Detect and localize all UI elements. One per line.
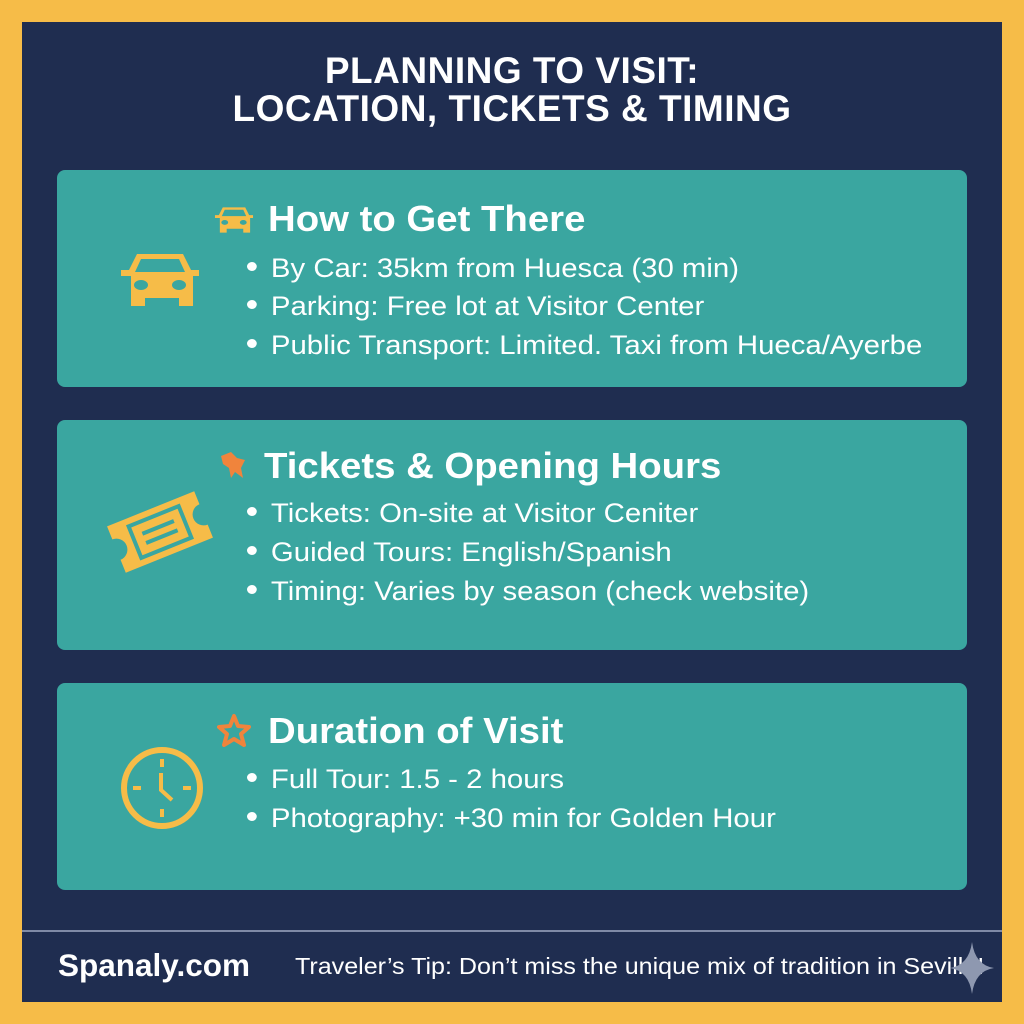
icon: small orange — [221, 452, 245, 478]
title: LOCATION, TICKETS & TIMING — [232, 88, 792, 129]
heading: Duration of Visit — [268, 710, 563, 751]
bullets: Photography: +30 min for Golden Hour — [271, 803, 776, 833]
title: PLANNING TO VISIT: — [325, 50, 699, 91]
footer brand: Spanaly.com — [58, 947, 250, 983]
panel: duration — [57, 683, 967, 890]
icon: sparkle — [950, 942, 994, 994]
heading: Tickets & Opening Hours — [264, 445, 721, 486]
bullets: Full Tour: 1.5 - 2 hours — [271, 764, 564, 794]
bullets: Parking: Free lot at Visitor Center — [271, 291, 704, 321]
icon: clock — [121, 747, 203, 829]
panel: tickets — [57, 420, 967, 650]
bullets: Timing: Varies by season (check website) — [271, 576, 809, 606]
heading: How to Get There — [268, 198, 585, 239]
bullets: By Car: 35km from Huesca (30 min) — [271, 253, 739, 283]
panel: how to get there — [57, 170, 967, 387]
footer tip: Traveler’s Tip: Don’t miss the unique mix of tradition in Seville! — [295, 953, 984, 979]
icon: star — [217, 714, 251, 747]
bullets: Public Transport: Limited. Taxi from Hueca/Ayerbe — [271, 330, 922, 360]
bullets — [247, 498, 809, 606]
icon: small car — [214, 207, 254, 233]
icon: large car — [121, 254, 199, 306]
bullets: Guided Tours: English/Spanish — [271, 537, 672, 567]
bullets — [247, 253, 922, 360]
icon: ticket — [107, 491, 213, 573]
title — [232, 50, 792, 129]
bullets — [247, 764, 776, 833]
bullets: Tickets: On-site at Visitor Ceniter — [271, 498, 698, 528]
